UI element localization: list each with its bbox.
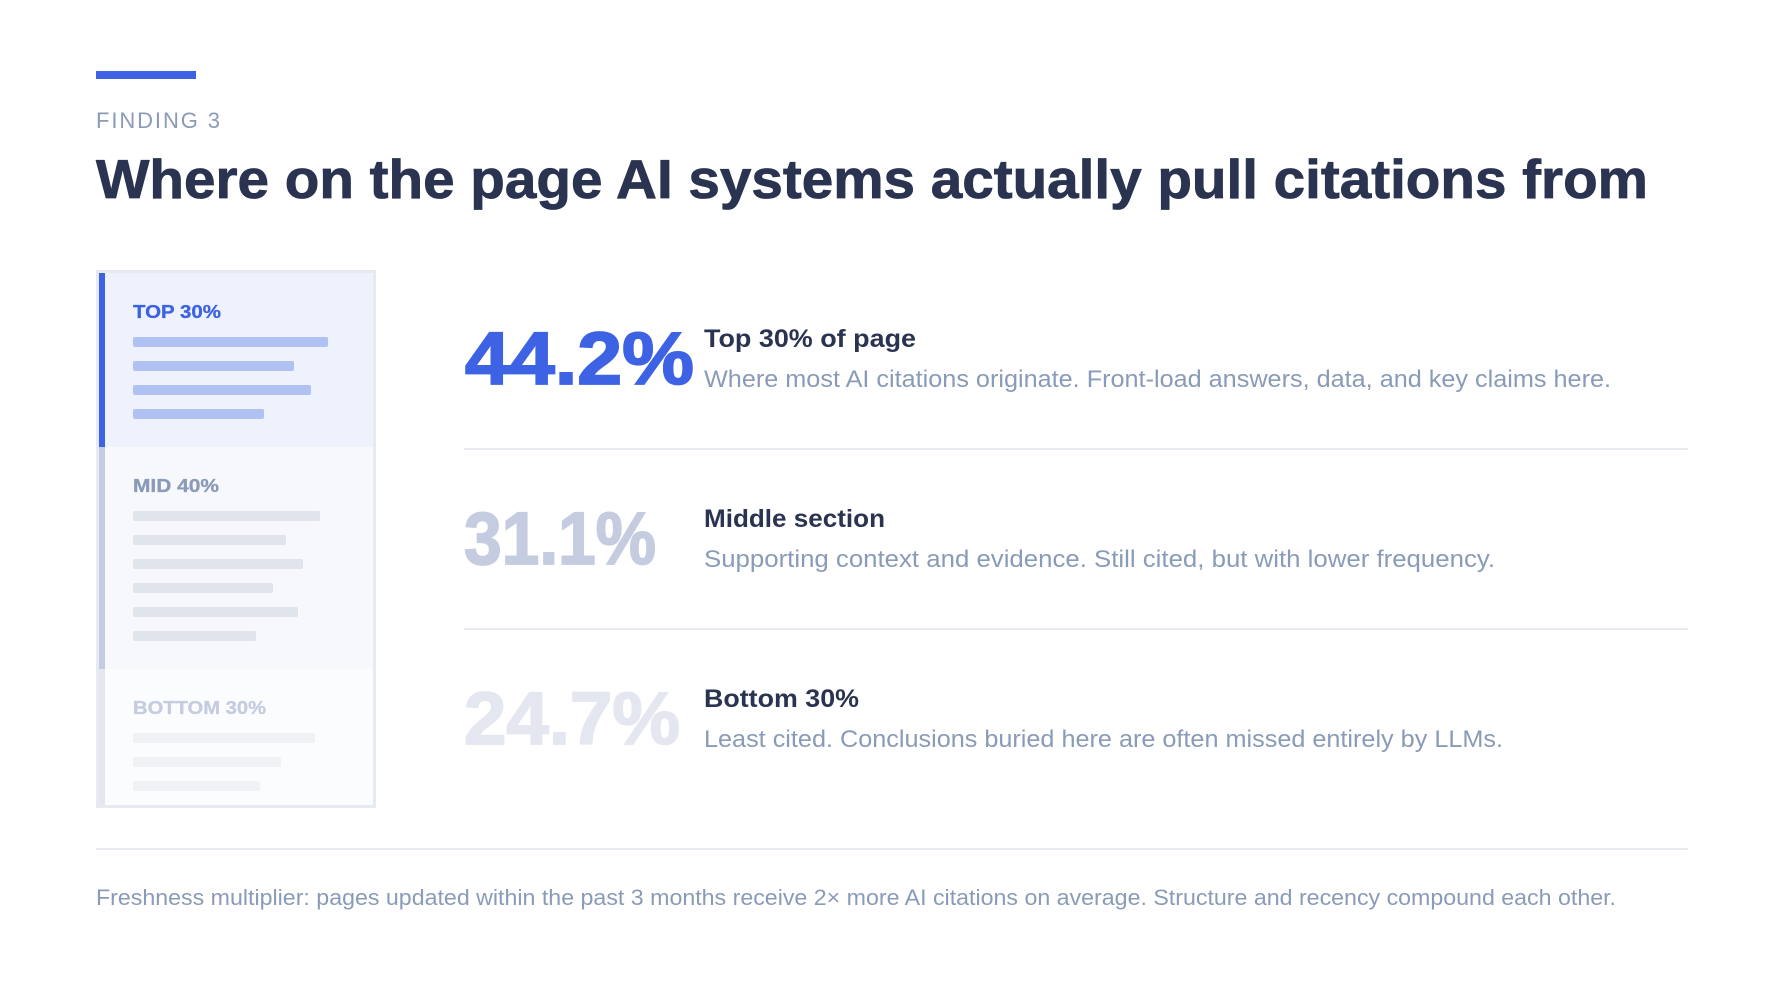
accent bar (96, 71, 196, 79)
row heading: Top 30% of page (704, 325, 916, 353)
panel: page diagram (98, 272, 374, 806)
stat row: middle section (464, 497, 1495, 580)
section: mid 40%: MID 40% (133, 476, 219, 496)
stat row: top 30% of page (465, 317, 1611, 400)
stat value 44.2%: 44.2% (465, 317, 694, 400)
footer note: Freshness multiplier: pages updated within the past 3 months receive 2× more AI citations on average. Structure and recency compound each other. (96, 885, 1616, 910)
section: bottom 30%: BOTTOM 30% (133, 698, 266, 718)
section: mid 40% (99, 447, 373, 669)
panel border (98, 272, 374, 806)
stat row: bottom 30% (464, 677, 1503, 760)
title: Where on the page AI systems actually pull citations from (96, 149, 1648, 210)
section: top 30%: TOP 30% (133, 302, 221, 322)
eyebrow: finding 3: FINDING 3 (96, 108, 220, 133)
section: bottom 30% (99, 669, 373, 805)
row description: Least cited. Conclusions buried here are often missed entirely by LLMs. (704, 726, 1503, 753)
row heading: Middle section (704, 505, 885, 533)
row description: Supporting context and evidence. Still cited, but with lower frequency. (704, 546, 1495, 573)
row description: Where most AI citations originate. Front-load answers, data, and key claims here. (704, 366, 1611, 393)
stat value 24.7%: 24.7% (464, 677, 680, 760)
stat value 31.1%: 31.1% (464, 497, 656, 580)
row heading: Bottom 30% (704, 685, 859, 713)
section: top 30% (99, 273, 373, 447)
